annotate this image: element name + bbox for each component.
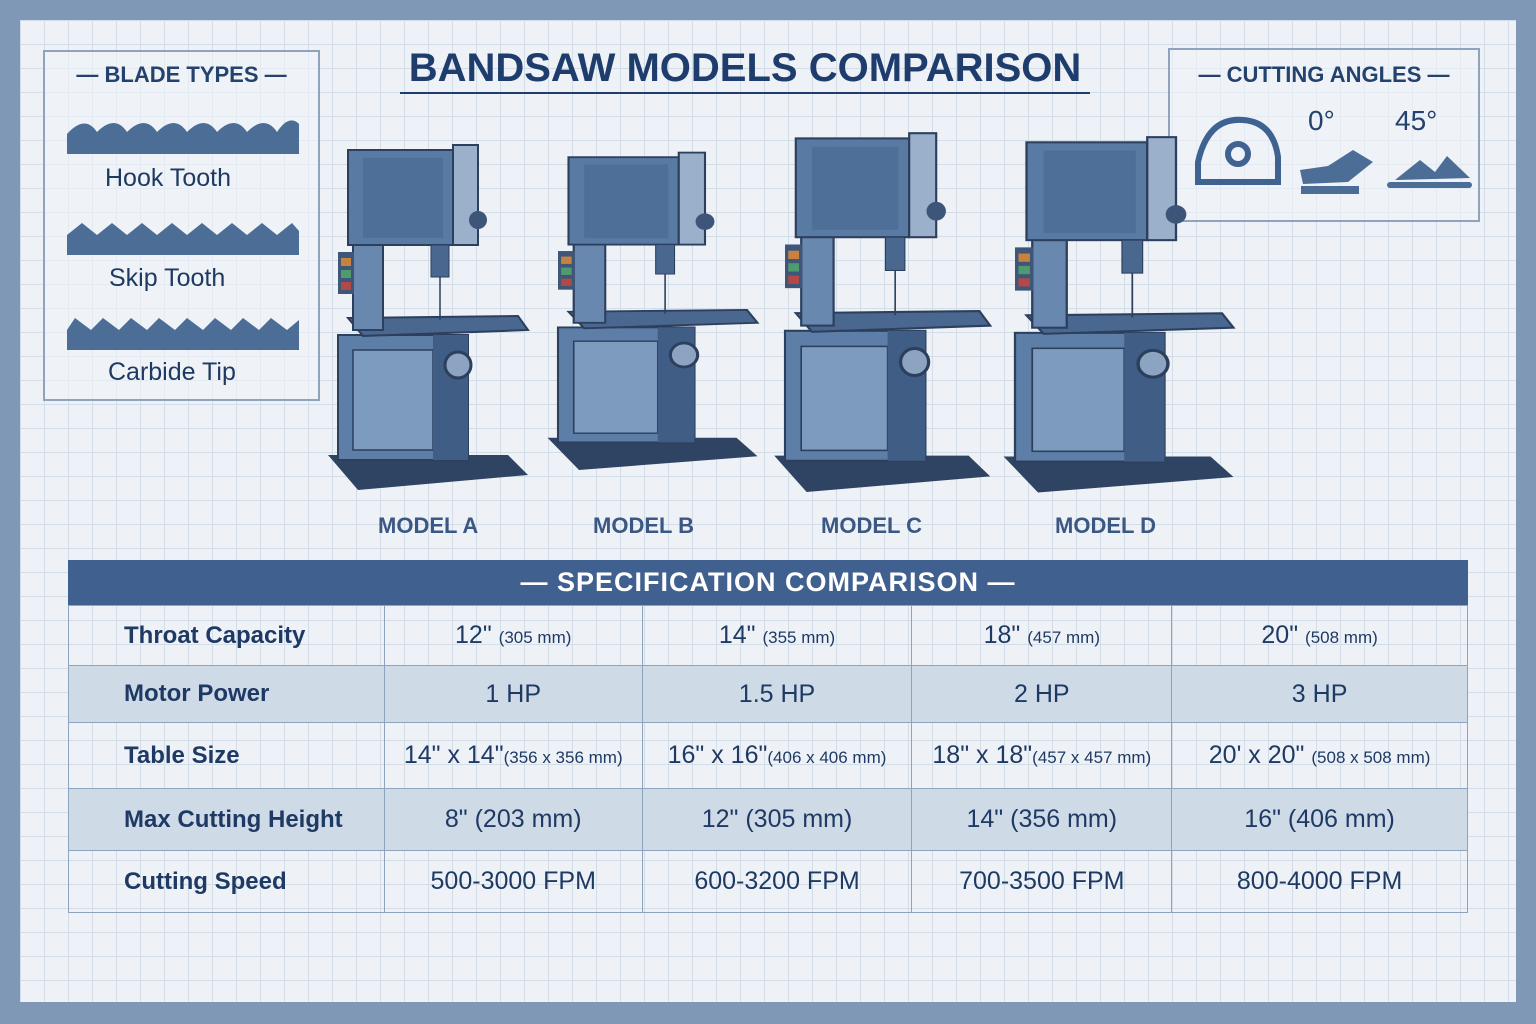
specification table: Motor Power xyxy=(124,680,269,707)
specification table: 14" x 14"(356 x 356 mm) xyxy=(404,741,623,769)
heading: blade types: — BLADE TYPES — xyxy=(76,62,287,87)
icon: 0 degree cut xyxy=(1300,150,1373,194)
icon: carbide tip blade xyxy=(67,318,299,350)
label: carbide tip: Carbide Tip xyxy=(108,358,236,386)
specification table: 14" (356 mm) xyxy=(966,805,1117,833)
panel: blade types xyxy=(43,50,320,401)
saw: model C xyxy=(774,133,990,492)
specification table: 20" (508 mm) xyxy=(1261,621,1378,649)
specification table: 16" x 16"(406 x 406 mm) xyxy=(668,741,886,769)
specification table: 1.5 HP xyxy=(739,680,815,708)
icon: 45 degree cut xyxy=(1387,156,1472,188)
icon: skip tooth blade xyxy=(67,223,299,255)
panel: cutting angles xyxy=(1168,48,1480,222)
icon: blade guard xyxy=(1195,116,1281,185)
specification table: Max Cutting Height xyxy=(124,806,343,832)
label: hook tooth: Hook Tooth xyxy=(105,164,231,192)
label: 45 degrees: 45° xyxy=(1395,105,1437,136)
title: BANDSAW MODELS COMPARISON xyxy=(409,46,1081,90)
saw: model B xyxy=(548,153,758,470)
specification table: 18" x 18"(457 x 457 mm) xyxy=(932,741,1151,769)
label: model B: MODEL B xyxy=(593,513,694,538)
specification table: 8" (203 mm) xyxy=(445,805,582,833)
label: 0 degrees: 0° xyxy=(1308,105,1335,136)
specification table: 3 HP xyxy=(1292,680,1347,708)
heading: cutting angles: — CUTTING ANGLES — xyxy=(1199,62,1449,87)
specification table: Table Size xyxy=(124,742,240,768)
label: model D: MODEL D xyxy=(1055,513,1156,538)
specification table: 700-3500 FPM xyxy=(959,867,1124,895)
specification table: 14" (355 mm) xyxy=(719,621,835,649)
specification table: Throat Capacity xyxy=(124,622,305,648)
specification table: 800-4000 FPM xyxy=(1237,867,1402,895)
specification table: 20' x 20" (508 x 508 mm) xyxy=(1209,741,1430,769)
specification table: 12" (305 mm) xyxy=(455,621,571,649)
specification table xyxy=(68,605,1468,913)
table header bar: — SPECIFICATION COMPARISON — xyxy=(520,567,1016,597)
label: skip tooth: Skip Tooth xyxy=(109,264,225,292)
specification table: 18" (457 mm) xyxy=(984,621,1100,649)
table header bar xyxy=(68,560,1468,605)
specification table: 12" (305 mm) xyxy=(702,805,852,833)
specification table: 1 HP xyxy=(485,680,541,708)
label: model C: MODEL C xyxy=(821,513,922,538)
label: model A: MODEL A xyxy=(378,513,478,538)
specification table: 500-3000 FPM xyxy=(431,867,596,895)
specification table: Cutting Speed xyxy=(124,868,287,894)
saw: model A xyxy=(328,145,528,490)
saw: model D xyxy=(1004,137,1234,492)
specification table: 16" (406 mm) xyxy=(1244,805,1395,833)
specification table: 2 HP xyxy=(1014,680,1070,708)
icon: hook tooth blade xyxy=(67,120,299,154)
saw illustrations xyxy=(328,132,1236,492)
specification table: 600-3200 FPM xyxy=(694,867,860,895)
